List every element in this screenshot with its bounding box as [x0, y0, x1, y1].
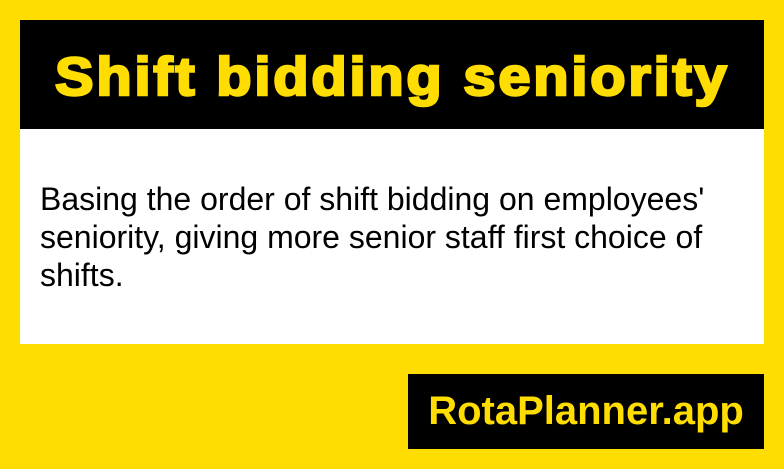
title: Shift bidding seniority — [55, 48, 729, 107]
brand badge — [408, 374, 764, 449]
panel: definition — [20, 129, 764, 344]
brand badge: RotaPlanner.app — [428, 389, 744, 433]
title — [20, 20, 764, 129]
text block: definition: Basing the order of shift bidding on employees' seniority, giving more senior staff first choice of shifts. — [40, 181, 704, 293]
